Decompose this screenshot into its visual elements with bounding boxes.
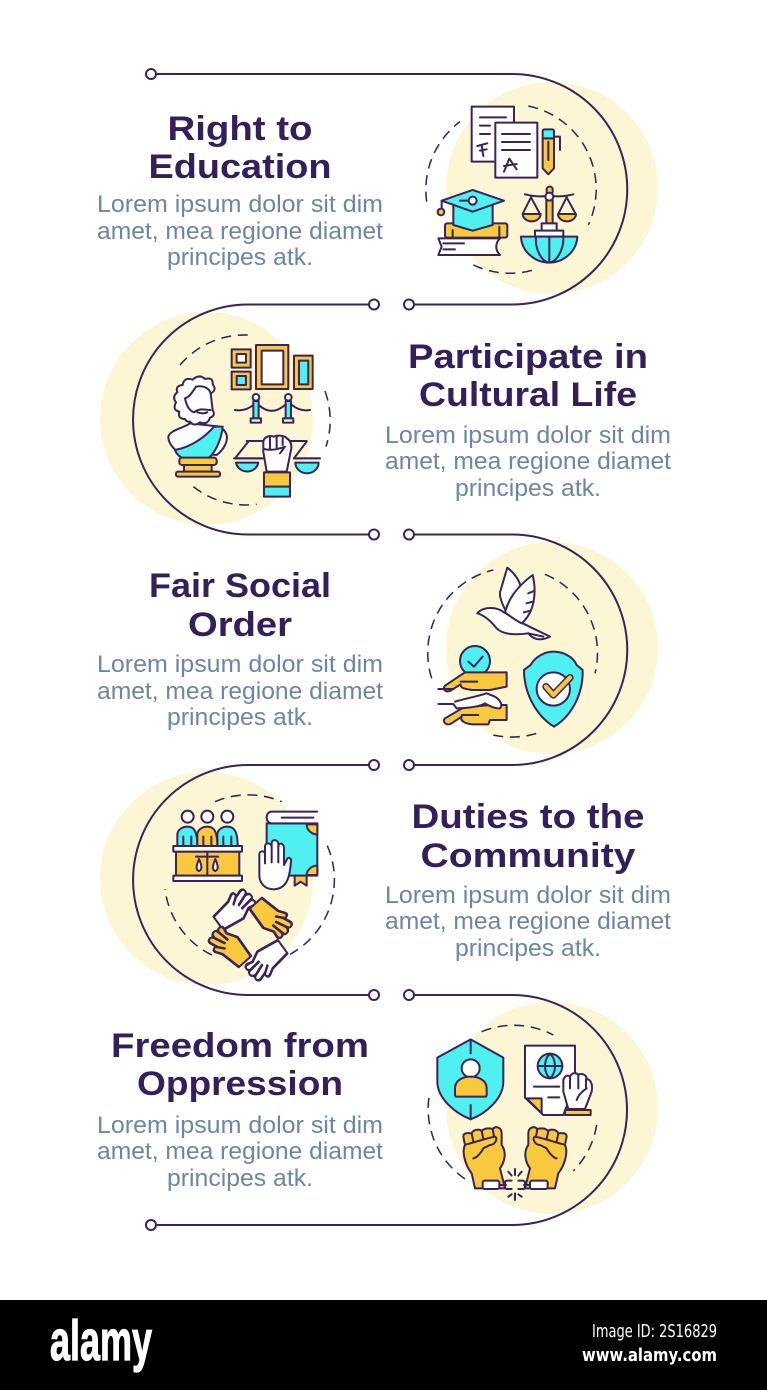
body text: amet, mea regione diamet [385, 908, 671, 935]
icon: fists breaking chain [463, 1127, 567, 1200]
heading [111, 1027, 369, 1103]
icon group: social order [428, 568, 597, 737]
body text [385, 882, 671, 962]
connector node bottom [404, 760, 414, 770]
yellow backdrop circle [446, 542, 658, 754]
body text: Lorem ipsum dolor sit dim [97, 1112, 383, 1139]
heading: Community [420, 837, 636, 875]
connector line [156, 74, 627, 304]
heading: Fair Social [149, 567, 331, 605]
panel: fair social order [97, 530, 658, 770]
heading: Participate in [408, 338, 648, 376]
yellow backdrop circle [100, 312, 313, 525]
heading: Freedom from [111, 1027, 369, 1065]
icon: joined hands [438, 672, 507, 724]
body text [385, 422, 671, 502]
yellow backdrop circle [446, 82, 658, 294]
connector node top [404, 990, 414, 1000]
body text [97, 1112, 383, 1192]
icon: graded papers [472, 107, 537, 178]
connector line [133, 304, 369, 534]
icon: graduation cap on books [438, 190, 507, 255]
connector node top [369, 300, 379, 310]
icon: jury at bench [173, 811, 242, 881]
connector node top [404, 530, 414, 540]
heading: Right to [168, 110, 312, 148]
connector line [414, 534, 627, 765]
connector node end [404, 300, 414, 310]
icon: picture frames [232, 345, 313, 389]
heading: Order [188, 606, 292, 644]
heading [408, 338, 648, 414]
connector line [156, 995, 627, 1225]
icon group: community [165, 795, 334, 985]
body text: amet, mea regione diamet [97, 678, 383, 705]
panel: freedom from oppression [97, 990, 658, 1230]
icon group: education [426, 106, 596, 273]
body text [97, 651, 383, 731]
icon: philosopher bust [168, 376, 227, 477]
body text [97, 191, 383, 271]
panel: duties to the community [100, 760, 671, 1000]
icon: four linked hands [205, 885, 296, 985]
connector node end [146, 1220, 156, 1230]
connector line [133, 765, 369, 995]
icon: scales over globe [521, 187, 577, 263]
footer bar [0, 1300, 767, 1390]
icon: person shield [437, 1039, 503, 1119]
heading [412, 798, 644, 875]
body text: principes atk. [167, 704, 313, 731]
icon group: culture [168, 335, 330, 505]
connector node bottom [369, 530, 379, 540]
panel: right to education [97, 69, 658, 310]
heading: Education [148, 148, 332, 186]
image id: Image ID: 2S16829 [592, 1321, 717, 1342]
body text: amet, mea regione diamet [385, 448, 671, 475]
icon group: freedom [428, 1025, 597, 1200]
icon: dove [477, 568, 550, 639]
body text: Lorem ipsum dolor sit dim [97, 651, 383, 678]
heading: Oppression [137, 1065, 343, 1103]
icon: shield with check [524, 652, 583, 727]
yellow backdrop circle [446, 1002, 658, 1214]
yellow backdrop circle [100, 772, 313, 985]
icon: hand on book [259, 812, 317, 889]
heading: Cultural Life [419, 376, 637, 414]
body text: principes atk. [167, 1165, 313, 1192]
body text: principes atk. [455, 475, 601, 502]
body text: Lorem ipsum dolor sit dim [97, 191, 383, 218]
footer logo: alamy [50, 1309, 152, 1373]
website: www.alamy.com [582, 1345, 717, 1366]
panel: participate in cultural life [100, 300, 671, 540]
heading [149, 567, 331, 644]
icon: pen [543, 129, 560, 174]
connector node top [369, 760, 379, 770]
body text: principes atk. [167, 244, 313, 271]
body text: Lorem ipsum dolor sit dim [385, 882, 671, 909]
connector node start [146, 69, 156, 79]
icon: check badge [460, 646, 490, 676]
heading: Duties to the [412, 798, 644, 836]
body text: amet, mea regione diamet [97, 218, 383, 245]
icon: passport document with fist [525, 1046, 592, 1115]
body text: amet, mea regione diamet [97, 1138, 383, 1165]
connector node bottom [369, 990, 379, 1000]
heading [148, 110, 332, 186]
body text: Lorem ipsum dolor sit dim [385, 422, 671, 449]
icon: fist with scales [234, 436, 320, 497]
icon: rope barrier [235, 394, 310, 423]
body text: principes atk. [455, 935, 601, 962]
